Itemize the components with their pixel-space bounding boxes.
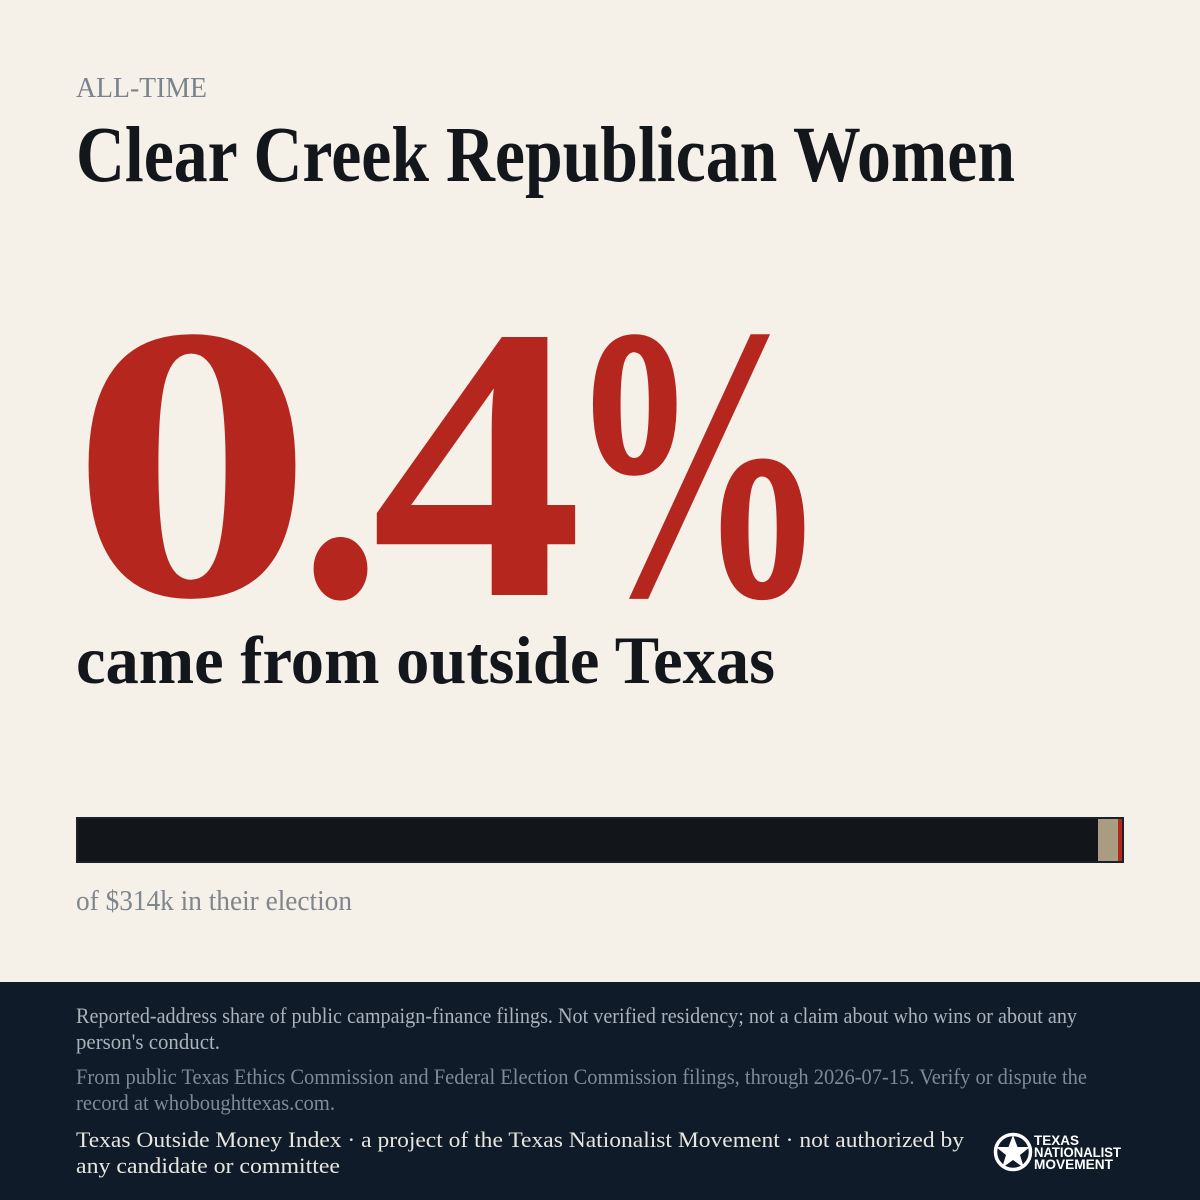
logo: Texas Nationalist Movement: TEXAS [1034,1133,1079,1148]
source note: record at whoboughttexas.com. [76,1090,335,1115]
bar caption: of $314k in their election [76,886,352,917]
methodology note [76,1003,1077,1054]
title: Clear Creek Republican Women [76,112,1015,199]
logo: Texas Nationalist Movement: NATIONALIST [1034,1145,1122,1160]
eyebrow label: ALL-TIME [76,72,207,104]
source note [76,1064,1087,1115]
stacked bar: share of money by origin [76,817,1124,863]
methodology note: Reported-address share of public campaign-finance filings. Not verified residency; not a claim about who wins or about any [76,1003,1077,1028]
hero statistic [70,246,829,680]
methodology note: person's conduct. [76,1029,220,1054]
hero statistic: . [299,246,382,680]
attribution: any candidate or committee [76,1153,340,1178]
attribution: Texas Outside Money Index · a project of the Texas Nationalist Movement · not authorized by [76,1127,964,1152]
attribution [76,1127,964,1178]
hero statistic: 4 [371,246,583,680]
hero statistic: % [566,246,829,680]
footer panel [0,982,1200,1200]
logo: Texas Nationalist Movement [996,1133,1122,1172]
hero caption: came from outside Texas [76,622,775,698]
hero statistic: 0 [70,246,314,680]
logo: Texas Nationalist Movement: MOVEMENT [1034,1157,1114,1172]
source note: From public Texas Ethics Commission and Federal Election Commission filings, through 2026-07-15. Verify or dispute the [76,1064,1087,1089]
